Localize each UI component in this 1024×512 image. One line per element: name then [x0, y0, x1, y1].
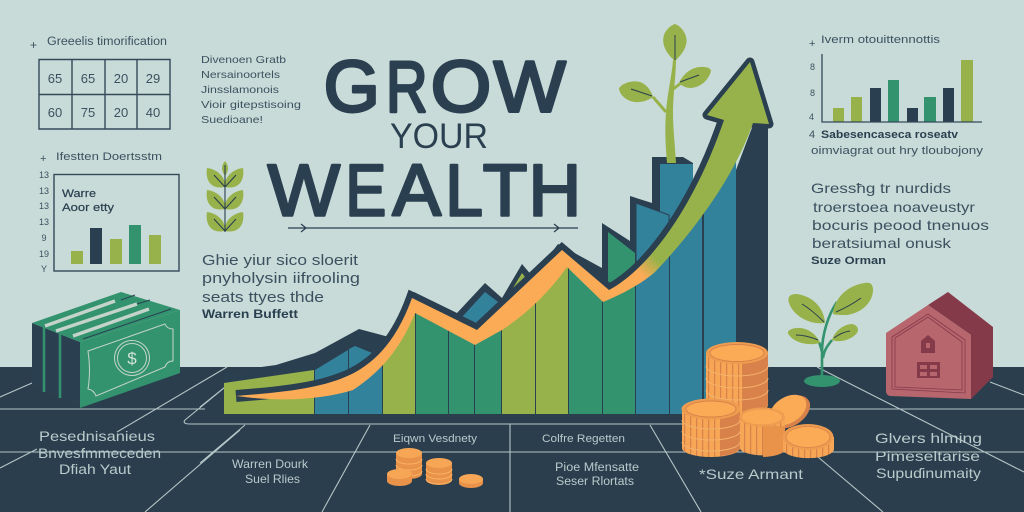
y axis labels: 4 [809, 112, 814, 122]
floor label: lower centre [555, 462, 639, 488]
floor [0, 367, 1024, 512]
text block: warren buffett quote: Warren Buffett [202, 307, 298, 321]
table values: 75 [81, 105, 95, 120]
table heading: Greeelis timorification [47, 36, 167, 48]
y axis labels: 13 [39, 186, 49, 196]
chart bars [224, 150, 736, 414]
text block: top left note: Jinsslamonois [201, 84, 279, 96]
heading word: wealth: H [528, 151, 581, 232]
text block: warren buffett quote: Ghie yiur sico sloerit [202, 253, 358, 269]
rising arrow [236, 62, 769, 399]
panel: top right bar chart [809, 34, 984, 157]
text block: top left note: Divenoen Gratb [201, 54, 286, 66]
floor label: warren: Suel Rlies [245, 472, 300, 486]
floor label: left: Pesednisanieus [39, 429, 155, 444]
y axis labels: 13 [39, 217, 49, 227]
main growth chart [224, 62, 769, 414]
floor label: warren [232, 457, 309, 486]
heading word: wealth [268, 151, 581, 232]
floor label: left: Dfiah Yaut [59, 462, 131, 477]
panel: top left table [30, 36, 170, 129]
chart label: Warre [62, 188, 96, 200]
chart heading: + [809, 38, 815, 50]
coin stack: middle [739, 408, 785, 457]
coin: flat [782, 424, 834, 458]
y axis labels [809, 62, 815, 122]
heading word: grow [324, 48, 566, 128]
y axis labels: 13 [39, 170, 49, 180]
y axis labels: 13 [39, 201, 49, 211]
chart heading: Iverm otouittennottis [821, 34, 941, 46]
icon: cash stack: $ [127, 349, 137, 368]
coin stack: left [682, 398, 740, 457]
text block: warren buffett quote: seats ttyes thde [202, 290, 324, 306]
chart caption: 4 [809, 129, 815, 141]
table values: 20 [114, 105, 128, 120]
heading: grow your wealth [268, 48, 581, 232]
table values: 20 [114, 71, 128, 86]
y axis labels: 8 [810, 62, 815, 72]
icon: small coins [387, 448, 483, 488]
heading word: grow: R [386, 48, 428, 128]
coin: leaning [764, 388, 816, 436]
text block: top left note: Nersainoortels [201, 69, 280, 81]
floor label: centre left: Eiqwn Vesdnety [393, 433, 478, 445]
text block: top left note: Suediɔane! [201, 114, 263, 126]
table heading [30, 36, 167, 52]
floor label: left: Bnvesfmmeceden [38, 446, 161, 461]
heading word: grow: O [431, 48, 491, 128]
chart heading [809, 34, 941, 50]
text block: warren buffett quote: pnyholysin iifrooling [202, 271, 360, 287]
floor label: right: Supuɗinumaity [876, 465, 981, 481]
chart caption: oimviagrat out hry tloubojony [811, 145, 984, 157]
table heading: + [30, 38, 37, 52]
rising arrow outline [236, 120, 724, 396]
text block: suze orman quote: beratsiumal onusk [812, 235, 952, 251]
text block: suze orman quote [811, 180, 989, 267]
table values: 65 [48, 71, 62, 86]
table values: 60 [48, 105, 62, 120]
y axis labels: 8 [810, 88, 815, 98]
heading word: grow: W [494, 48, 566, 128]
floor labels [38, 429, 982, 488]
floor label: lower centre: Seser Rlortats [556, 476, 634, 488]
text block: top left note [201, 54, 301, 126]
floor label: right: Pimeseltarise [875, 448, 980, 464]
heading word: wealth: A [392, 151, 441, 232]
icon: large coin pile [682, 342, 834, 458]
chart heading [40, 151, 162, 165]
icon: cash stack [32, 292, 180, 408]
heading underline arrow [288, 224, 578, 232]
chart axes [822, 54, 982, 122]
table values: 40 [146, 105, 160, 120]
text block: top left note: Vioir gitepstisoing [201, 99, 301, 111]
text block: suze orman quote: Gressħg tr nurdids [811, 180, 951, 196]
floor label: lower centre: Pioe Mfensatte [555, 462, 639, 474]
table values [48, 71, 160, 120]
icon: leaf sprig [207, 161, 243, 232]
text block: suze orman quote: Suze Orman [811, 255, 886, 267]
y axis labels: Y [41, 264, 47, 274]
chart bars [833, 60, 973, 122]
y axis labels [39, 170, 49, 274]
table grid [39, 60, 170, 129]
heading word: grow: G [324, 48, 380, 128]
coin stack: tall [706, 342, 768, 415]
heading word: wealth: W [268, 151, 340, 232]
chart caption [809, 129, 984, 157]
icon: top seedling [619, 24, 711, 163]
heading word: wealth: L [445, 151, 483, 232]
floor label: right [875, 430, 982, 481]
text block: suze orman quote: bocuris peood tnenuos [812, 217, 989, 233]
chart label [62, 188, 115, 214]
heading word: wealth: T [483, 151, 527, 232]
panel: left bar chart [39, 151, 179, 274]
arrow head outline [707, 62, 769, 124]
floor label: centre right: Colfre Regetten [542, 433, 625, 445]
chart heading: Ifestten Doertsstm [56, 151, 162, 163]
chart caption: Sabesencaseca roseatv [821, 129, 959, 141]
icon: right seedling [788, 283, 873, 387]
floor label: suze: *Suze Armant [699, 466, 803, 482]
table values: 29 [146, 71, 160, 86]
table values: 65 [81, 71, 95, 86]
chart silhouette [224, 125, 768, 414]
text block: suze orman quote: troerstoea noaveustyr [813, 199, 975, 215]
floor label: warren: Warren Dourk [232, 457, 309, 471]
chart frame [54, 174, 179, 271]
heading word: wealth: E [345, 151, 386, 232]
chart bars [71, 225, 161, 264]
chart label: Aoor etty [62, 202, 115, 214]
text block: warren buffett quote [202, 253, 360, 321]
chart heading: + [40, 153, 46, 165]
floor label: right: Glvers hlming [875, 430, 982, 446]
floor label: left [38, 429, 161, 477]
icon: house [886, 292, 993, 399]
heading word: your: YOUR [390, 117, 488, 156]
y axis labels: 9 [41, 233, 47, 243]
y axis labels: 19 [39, 249, 49, 259]
